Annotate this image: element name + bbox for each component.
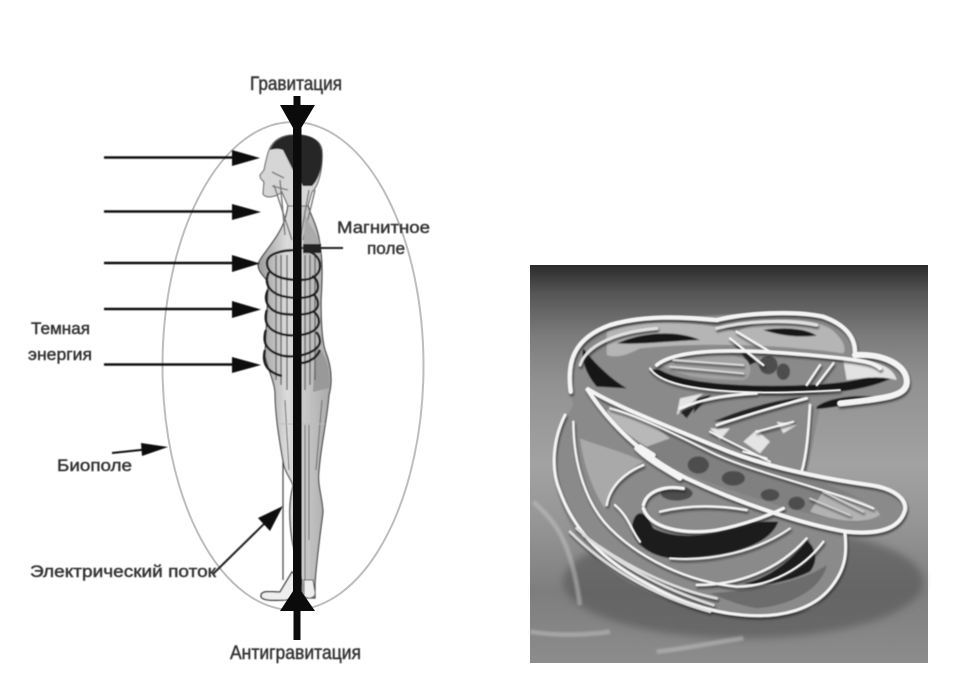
label: magnetic field: [337, 218, 430, 258]
centre translucent cells: [677, 393, 797, 453]
diagonal ribbon: [605, 408, 874, 523]
floor highlight: [530, 502, 743, 652]
biofield arrow: [112, 443, 168, 456]
human body figure: [258, 135, 343, 600]
biofield ellipse: [162, 122, 424, 610]
dark pocket upper: [650, 369, 895, 395]
label: dark energy: Темная: [31, 319, 90, 338]
arrow 2: [104, 204, 261, 220]
gravity axis with arrows: [280, 96, 315, 640]
antigravity arrow: [280, 585, 315, 640]
arrow 3: [104, 255, 260, 272]
label: electric flow: Электрический поток: [30, 562, 217, 581]
top light band: [607, 320, 845, 356]
label: gravity: Гравитация: [250, 74, 342, 95]
leg bones: [280, 400, 325, 590]
dark diagonal stripes: [680, 338, 803, 422]
arrow 1: [104, 150, 260, 166]
gravity arrow: [280, 96, 315, 135]
left window: [580, 438, 643, 508]
electric flow arrow: [213, 506, 283, 574]
knot white highlights: [554, 313, 907, 616]
hair: [270, 135, 322, 186]
torso rib lines: [276, 255, 315, 390]
top dark bands: [582, 328, 877, 409]
electric flow line: [282, 462, 284, 580]
diagonal ribbon light end: [607, 410, 670, 447]
neck muscles: [272, 172, 315, 240]
diagonal ribbon cells: [661, 356, 805, 510]
central axis: [293, 125, 302, 595]
dark pocket lower: [632, 513, 778, 558]
magnetic coil: [264, 250, 320, 376]
shoulder shading: [303, 215, 321, 254]
arrow 4: [104, 301, 261, 318]
knot tones: [555, 313, 908, 616]
magnetic field pointer: [300, 247, 343, 249]
label: magnetic field: поле: [367, 239, 405, 258]
knot body: [555, 313, 908, 616]
arrow 5: [104, 357, 261, 373]
head: [260, 135, 322, 206]
photo: glass knot sculpture: [530, 265, 928, 663]
right upper light band: [843, 360, 897, 380]
foot: [261, 572, 302, 600]
label: magnetic field: Магнитное: [337, 218, 430, 237]
dark pocket right: [743, 540, 815, 584]
ribbon tip light: [810, 492, 880, 521]
front foot: [304, 580, 315, 598]
lower grey band: [710, 565, 827, 608]
abdomen shading: [313, 345, 329, 392]
floor shadow: [563, 525, 923, 638]
dark energy arrows: [104, 150, 283, 574]
label: biofield: Биополе: [57, 456, 132, 475]
label: dark energy: [28, 319, 92, 364]
label: antigravity: Антигравитация: [230, 643, 361, 664]
label: dark energy: энергия: [28, 345, 92, 364]
body silhouette: [258, 205, 331, 598]
upper ribbon fill: [658, 352, 750, 380]
